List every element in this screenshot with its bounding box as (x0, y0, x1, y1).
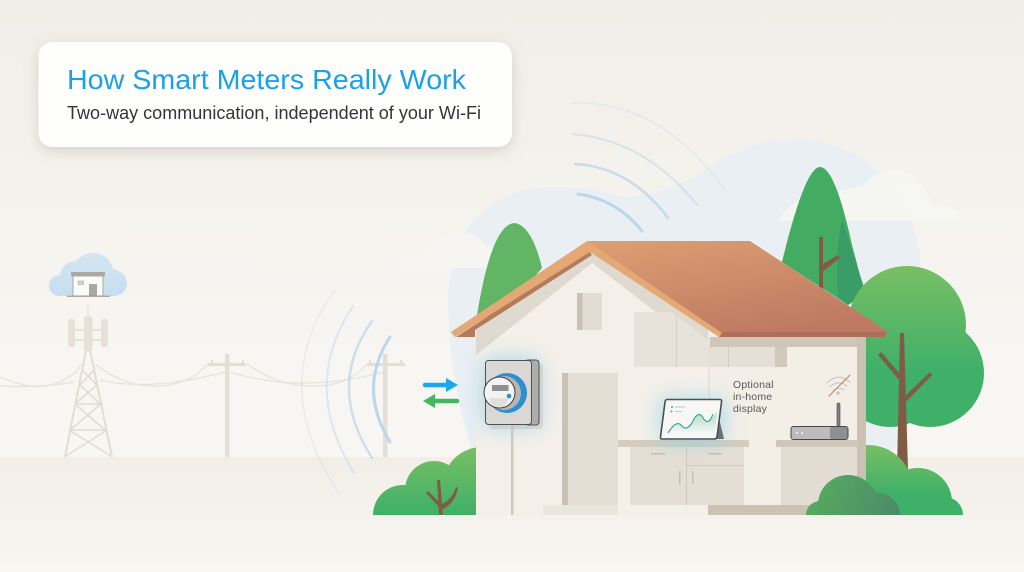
right wing of house (708, 337, 866, 515)
subtitle: Two-way communication, independent of your Wi-Fi (67, 103, 481, 123)
utility pole 1 (208, 354, 246, 457)
signal waves from meter (302, 290, 390, 495)
icon: crossed-out wifi (827, 375, 850, 396)
icon: smart meter (484, 360, 543, 515)
main roof (587, 241, 887, 337)
left shrub group (373, 448, 476, 515)
right shrub group (806, 445, 963, 515)
upper cabinets (634, 312, 728, 367)
signal waves above roof (572, 103, 725, 231)
utility pole 2 (367, 354, 405, 457)
icon: cloud data centre (49, 253, 127, 296)
pale blue sky blob behind house (448, 139, 921, 462)
data flow arrows (423, 378, 458, 408)
optional in-home display label: display (733, 403, 768, 415)
front door (543, 373, 618, 515)
optional in-home display label: Optional (733, 379, 774, 391)
background clouds (393, 170, 968, 268)
arrow: data in to meter (435, 399, 457, 403)
round tree (838, 266, 984, 470)
glow behind tablet (660, 398, 724, 442)
power lines (0, 364, 384, 386)
right cone tree (782, 167, 865, 305)
kitchen counter and cabinets (618, 440, 808, 515)
arrowhead: blue (446, 378, 458, 392)
front gable wall (476, 251, 710, 515)
left cone tree (477, 223, 542, 318)
cell tower (65, 305, 112, 457)
icon: in-home display tablet (660, 400, 724, 439)
heading: How Smart Meters Really Work (67, 64, 467, 95)
glow behind meter (482, 358, 540, 428)
title card (38, 42, 512, 147)
optional in-home display label: in-home (733, 391, 772, 403)
gable roof trim (451, 241, 722, 337)
arrow: data out to network (425, 383, 446, 387)
icon: wi-fi router (791, 403, 848, 440)
arrowhead: green (423, 394, 435, 408)
attic window (577, 293, 602, 330)
card background (38, 42, 512, 147)
